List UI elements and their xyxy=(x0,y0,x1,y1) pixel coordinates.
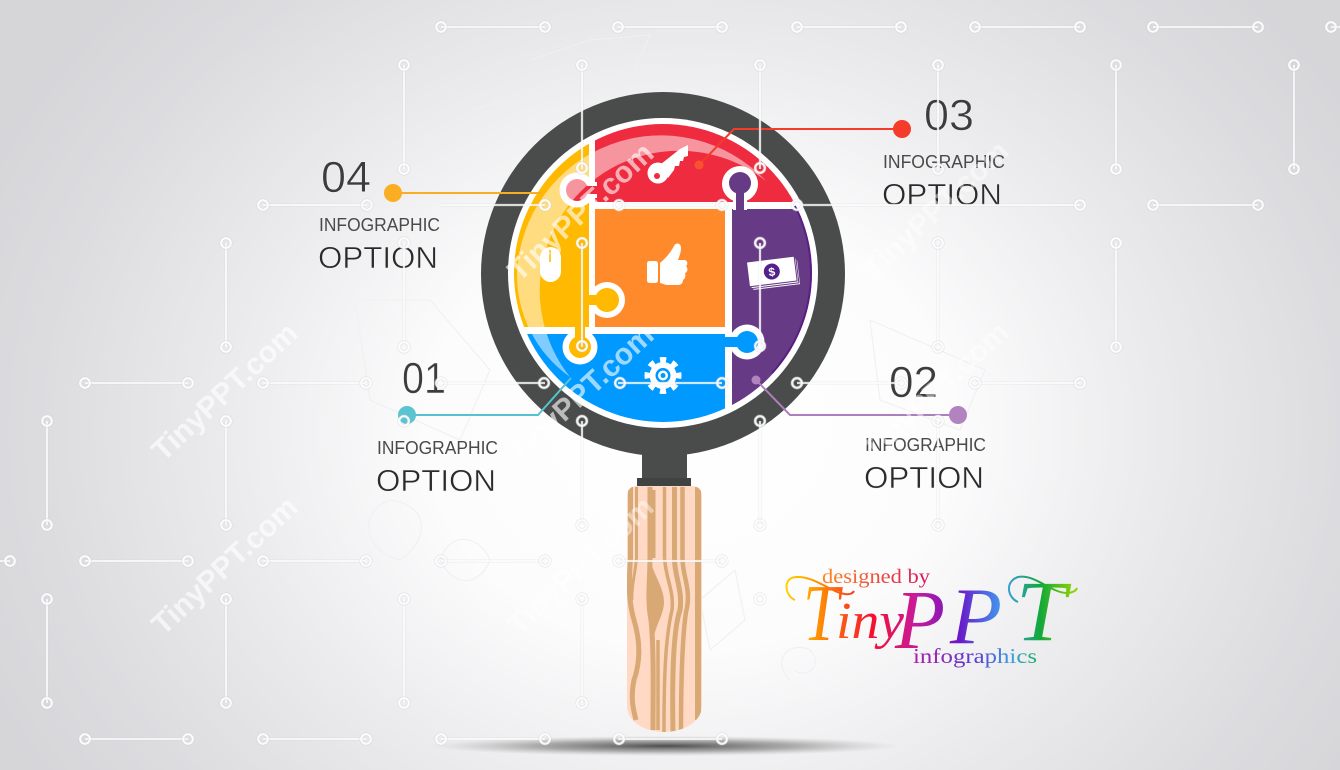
option 02: OPTION xyxy=(864,460,984,495)
knob: yellow into orange xyxy=(587,282,625,318)
lens frame xyxy=(481,92,845,456)
logo P second: P xyxy=(949,573,1002,661)
watermarks: TinyPPT.com xyxy=(502,319,660,470)
watermarks: TinyPPT.com xyxy=(502,137,660,288)
number 01: 01 xyxy=(402,354,446,403)
watermarks xyxy=(146,135,1015,642)
watermarks: TinyPPT.com xyxy=(857,316,1015,467)
icon: dollar bills: $ xyxy=(768,265,776,279)
icon: thumbs up xyxy=(647,244,687,285)
icon: gear xyxy=(648,360,678,390)
leader line 03 xyxy=(694,120,911,170)
logo iny: iny xyxy=(836,593,905,650)
white gaps xyxy=(589,110,732,443)
watermarks: TinyPPT.com xyxy=(146,491,304,642)
purple edge xyxy=(772,206,812,374)
watermarks: TinyPPT.com xyxy=(502,491,660,642)
designed by: designed by xyxy=(822,566,930,588)
option 01: OPTION xyxy=(376,463,496,498)
infographics: infographics xyxy=(913,644,1037,668)
wooden handle xyxy=(627,486,702,732)
magnifier xyxy=(481,92,845,732)
piece: blue xyxy=(527,334,725,422)
logo xyxy=(786,563,1077,668)
knob: red into yellow xyxy=(560,172,597,208)
leader line 04 xyxy=(384,184,542,202)
knob: purple into red xyxy=(722,166,758,212)
puzzle pieces xyxy=(514,124,812,422)
option 03: OPTION xyxy=(882,177,1002,212)
handle neck xyxy=(637,445,691,486)
label 04: INFOGRAPHIC xyxy=(319,215,440,235)
piece: red xyxy=(595,124,794,202)
piece: yellow xyxy=(514,144,589,327)
icon: key xyxy=(648,145,688,184)
option 04: OPTION xyxy=(318,240,438,275)
logo T: T xyxy=(1016,563,1071,659)
callout 02 xyxy=(752,358,986,495)
knob: yellow into blue xyxy=(562,325,598,364)
leader line 02 xyxy=(752,376,967,424)
callout 03 xyxy=(694,91,1005,212)
icon: dollar bills xyxy=(746,256,801,291)
logo P: P xyxy=(894,574,945,667)
logo swashes xyxy=(786,577,1077,602)
leader line 01 xyxy=(398,378,571,424)
watermarks: TinyPPT.com xyxy=(146,317,304,468)
knob: blue into purple xyxy=(723,324,764,360)
label 02: INFOGRAPHIC xyxy=(865,435,986,455)
watermarks: TinyPPT.com xyxy=(857,135,1015,286)
callout 01 xyxy=(376,354,571,498)
logo Tiny capital: T xyxy=(803,570,843,658)
number 03: 03 xyxy=(924,91,974,140)
glass highlight crescent xyxy=(517,135,766,377)
piece: orange xyxy=(595,209,725,327)
ground shadow xyxy=(430,736,900,756)
faint background doodles xyxy=(355,35,985,680)
icon: computer mouse xyxy=(540,247,561,282)
label 03: INFOGRAPHIC xyxy=(883,152,1005,172)
piece: purple xyxy=(732,209,812,405)
number 04: 04 xyxy=(321,153,371,202)
label 01: INFOGRAPHIC xyxy=(377,438,498,458)
number 02: 02 xyxy=(889,358,938,407)
callout 04 xyxy=(318,153,542,275)
